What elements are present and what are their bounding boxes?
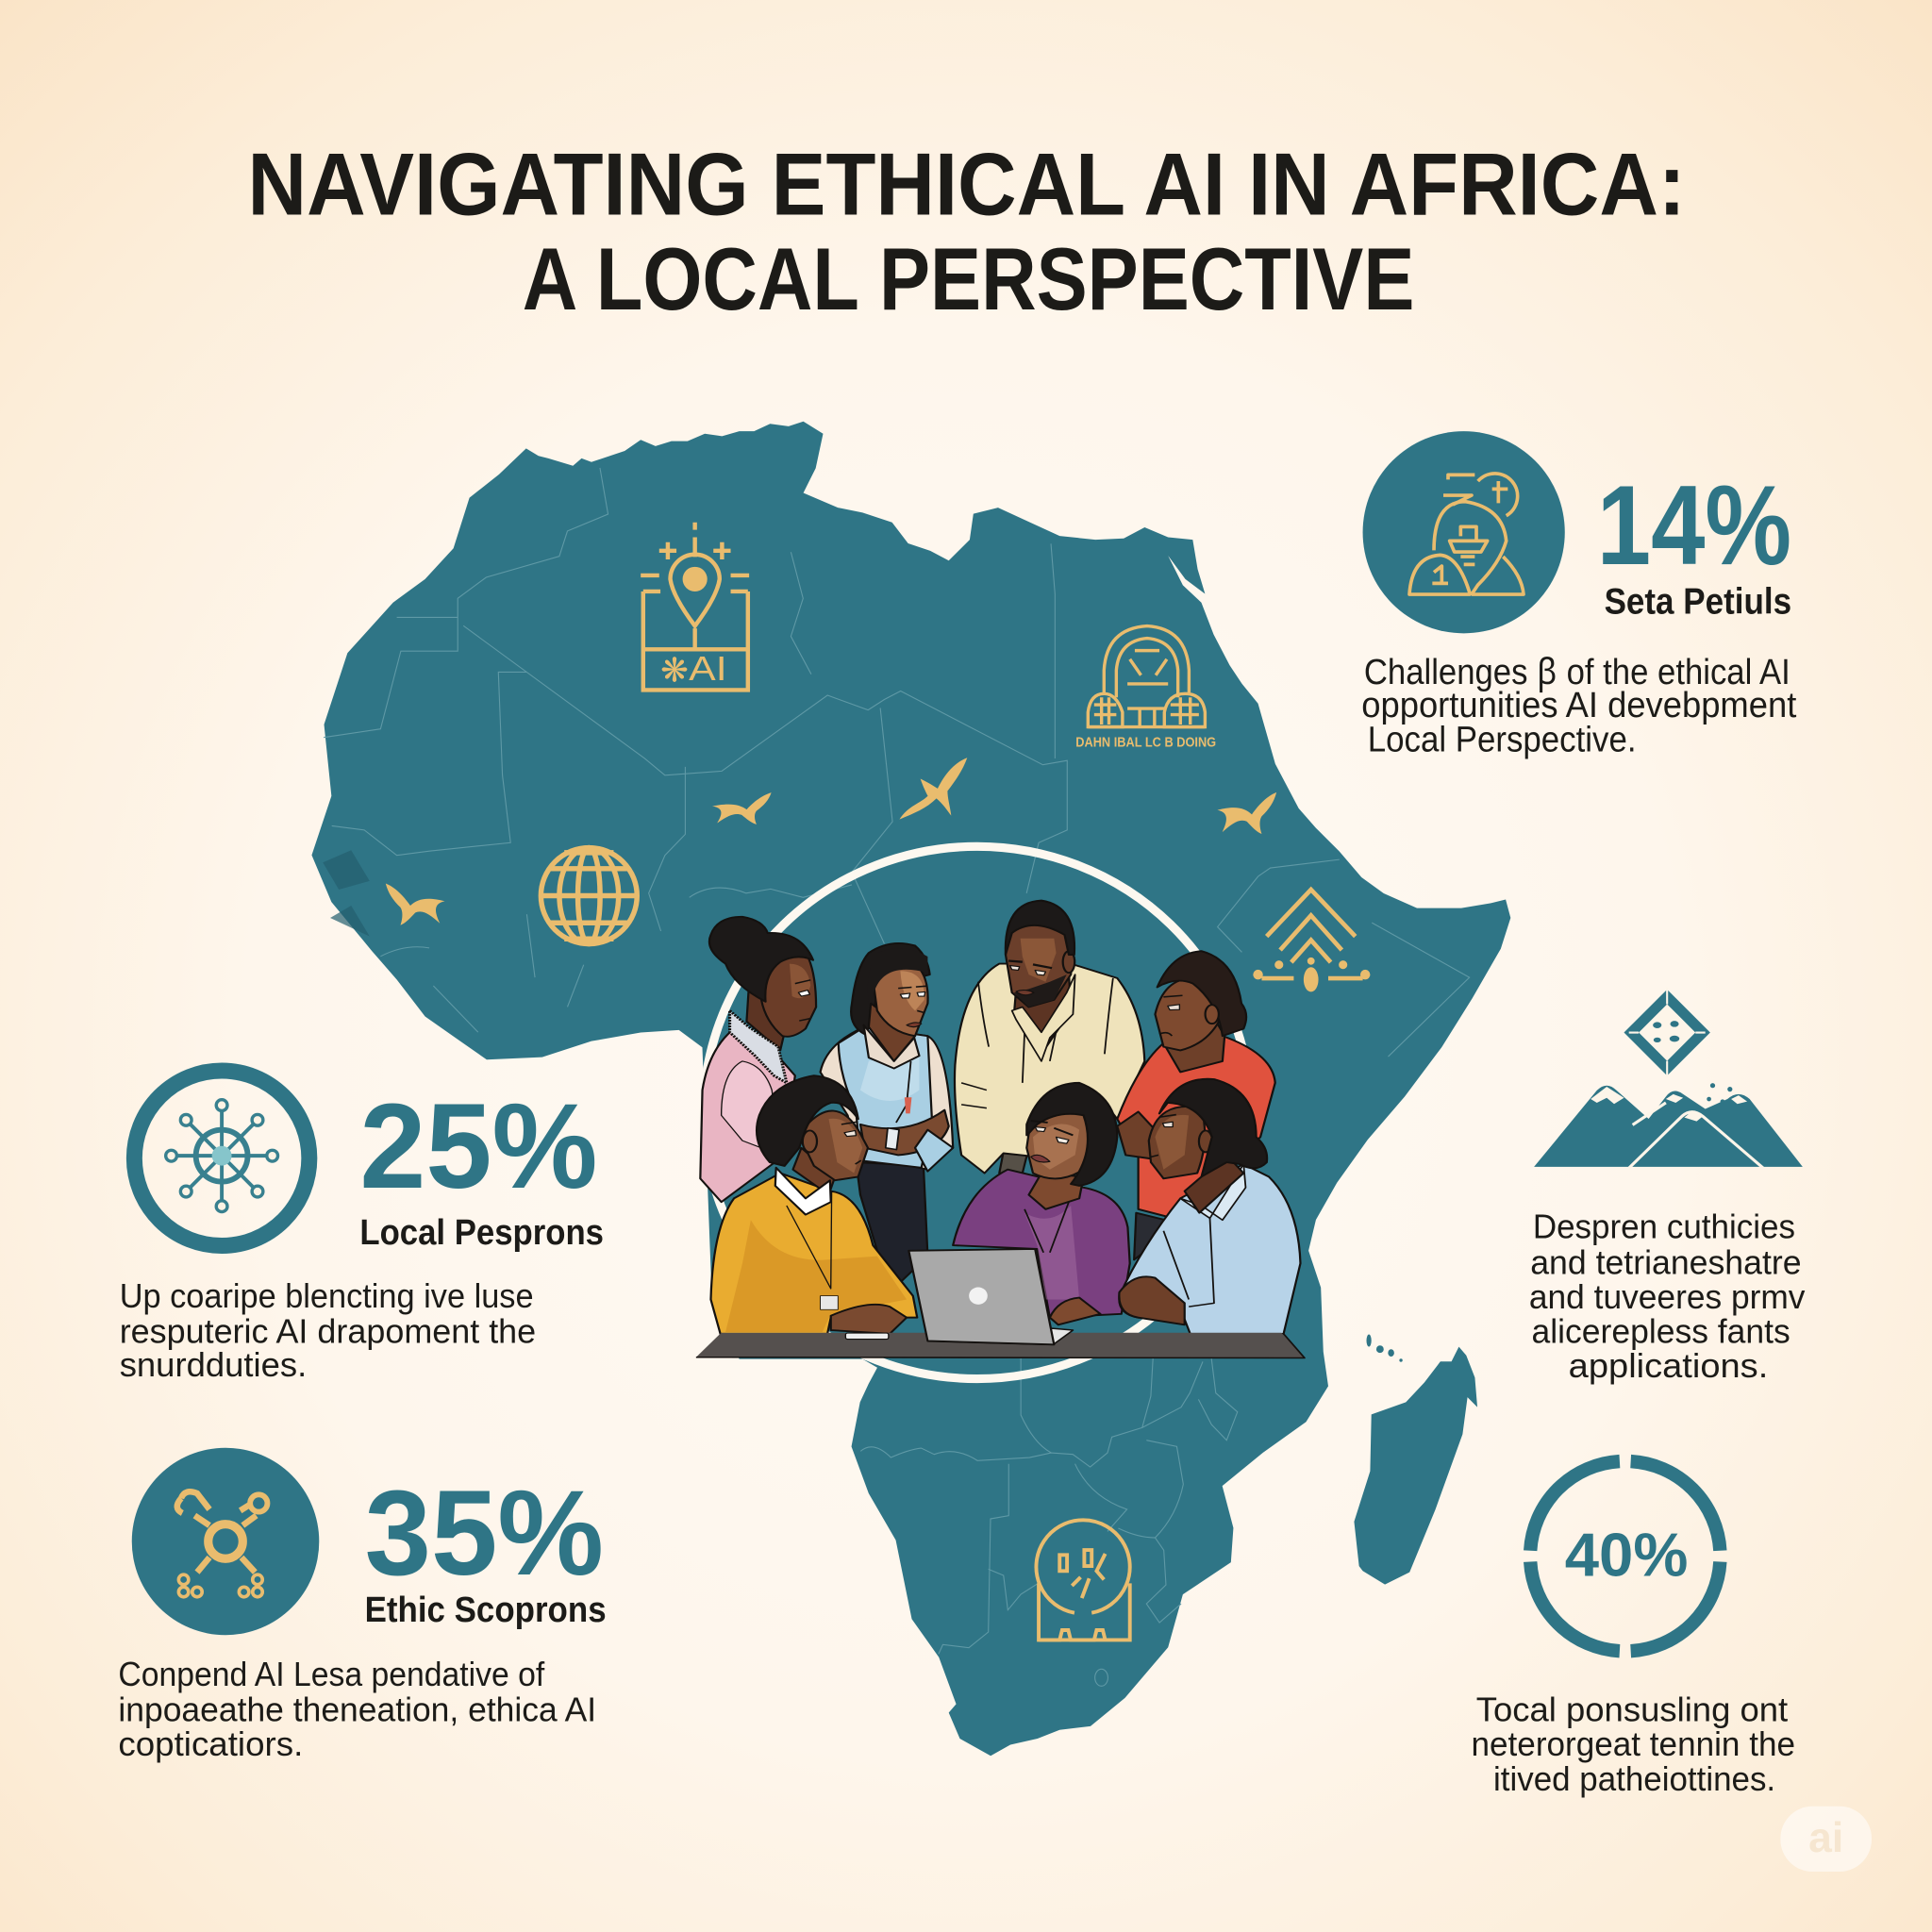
Comoros islands [1366, 1335, 1403, 1362]
label: Seta Petiuls [1605, 581, 1791, 622]
description [118, 1655, 596, 1763]
panel: mountains and policies [1529, 987, 1806, 1385]
description [1361, 653, 1797, 760]
description: itived patheiottines. [1493, 1759, 1775, 1798]
icon: globe [541, 848, 637, 943]
icon: house network [1253, 890, 1370, 991]
watermark [1780, 1807, 1872, 1872]
icon: diamond [1624, 987, 1710, 1078]
title [248, 134, 1686, 328]
illustration: team around laptop [696, 901, 1305, 1357]
description: Local Perspective. [1368, 721, 1637, 760]
northern borders [324, 468, 1470, 1057]
description: snurdduties. [120, 1345, 307, 1384]
person: woman in red [1117, 951, 1275, 1259]
icon: AI lightbulb: ❋ [660, 652, 689, 689]
icon: hub and nodes [132, 1448, 319, 1635]
description: opportunities AI devebpment [1361, 686, 1797, 725]
description: inpoaeathe theneation, ethica AI [118, 1690, 596, 1729]
map of Africa [311, 422, 1510, 1756]
person: man in cream shirt [955, 901, 1144, 1174]
description: copticatiors. [118, 1724, 303, 1763]
icon: network wheel [134, 1071, 309, 1245]
icon: AI lightbulb: AI [689, 649, 727, 688]
person: woman in purple [953, 1083, 1130, 1324]
person: woman in blue vest [821, 943, 953, 1292]
watermark: ai [1808, 1815, 1843, 1861]
description: resputeric AI drapoment the [120, 1312, 536, 1351]
icon: 14% people badge [1363, 431, 1565, 633]
description: applications. [1569, 1346, 1768, 1385]
icon: southern Africa seal [1036, 1520, 1130, 1640]
Madagascar [1354, 1347, 1477, 1585]
description [120, 1276, 536, 1384]
person: woman in light blue [1119, 1079, 1300, 1336]
description: alicerepless fants [1532, 1312, 1790, 1351]
West African coast texture [323, 850, 370, 937]
mainland [311, 422, 1510, 1756]
white ring around team [704, 846, 1251, 1379]
person: woman in pink [700, 917, 816, 1202]
stat: 25% [120, 1071, 604, 1384]
icon: temple [1075, 626, 1216, 751]
description [1529, 1208, 1806, 1385]
icon: birds [386, 758, 1276, 925]
title: A LOCAL PERSPECTIVE [523, 229, 1414, 328]
stat: 14% [1361, 431, 1797, 760]
description: Up coaripe blencting ive luse [120, 1276, 534, 1315]
gauge ring [1530, 1461, 1720, 1651]
icon: temple: DAHN IBAL LC B DOING [1075, 736, 1216, 751]
description: and tetrianeshatre [1530, 1243, 1802, 1282]
value: 25% [359, 1079, 597, 1214]
person: woman in yellow [710, 1075, 917, 1338]
southern borders [860, 1358, 1238, 1686]
stat: 35% [118, 1448, 607, 1763]
description: Tocal ponsusling ont [1476, 1690, 1788, 1729]
laptop [908, 1249, 1073, 1344]
value: 40% [1565, 1521, 1688, 1590]
description: Despren cuthicies [1533, 1208, 1795, 1246]
phone [845, 1333, 889, 1340]
icon: AI lightbulb [641, 523, 749, 690]
title: NAVIGATING ETHICAL AI IN AFRICA: [248, 134, 1686, 233]
description [1472, 1690, 1795, 1798]
label: Local Pesprons [359, 1213, 604, 1253]
label: Ethic Scoprons [365, 1591, 607, 1630]
value: 14% [1597, 462, 1791, 589]
value: 35% [365, 1466, 604, 1601]
description: and tuveeres prmv [1529, 1277, 1806, 1316]
description: Conpend AI Lesa pendative of [118, 1655, 545, 1693]
icon: mountains [1534, 1083, 1803, 1168]
description: neterorgeat tennin the [1472, 1724, 1795, 1763]
table [696, 1333, 1305, 1357]
description: Challenges ꞵ of the ethical AI [1364, 653, 1790, 693]
stat: 40% [1472, 1461, 1795, 1798]
